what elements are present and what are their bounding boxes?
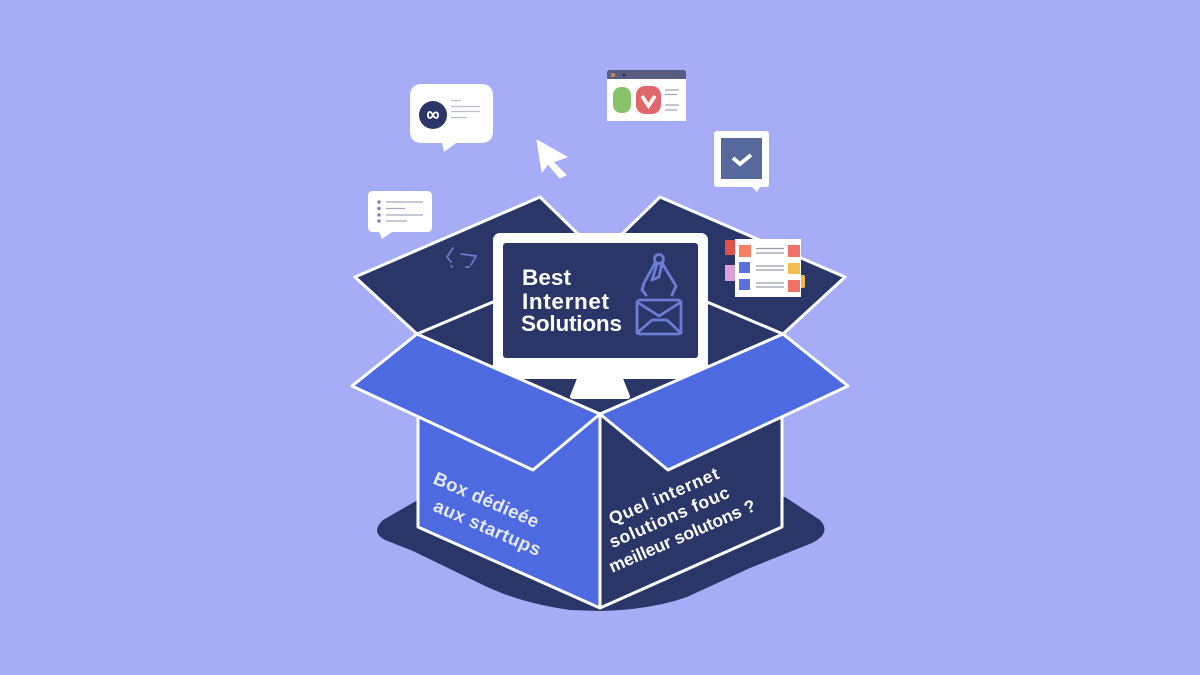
back left flap [355,197,580,334]
monitor screen [503,243,698,358]
window buttons [611,73,615,77]
screen title: Internet [522,289,610,314]
right face label: solutions fouc [606,482,732,552]
row lines [756,248,784,287]
logo glyph [428,112,438,118]
colored task list card [725,239,805,297]
icon: envelope with pin [637,254,681,334]
tabs behind card [725,240,737,255]
screen title: Best [522,265,572,290]
icon: code brackets on flap [447,248,476,267]
window title bar [607,70,686,79]
speech bubble with logo [410,84,493,152]
right box face [600,414,782,608]
list lines [386,202,423,221]
bubble text lines [451,100,480,118]
check mark [733,155,751,164]
red badge with check [636,86,661,114]
logo circle [419,101,447,129]
box ground shadow [377,497,824,611]
speech bubble with list [368,191,432,239]
monitor stand [570,376,630,399]
icon: cursor arrow [537,140,567,178]
monitor [493,233,708,399]
list bullets [377,200,381,223]
right face label [588,455,759,577]
window text lines [665,90,679,110]
left box face [418,414,600,608]
monitor frame [493,233,708,379]
checkbox bubble [714,131,769,192]
card [735,239,801,297]
right face label: Quel internet [606,463,722,529]
box interior [417,299,783,414]
checkbox square [721,138,762,179]
back right flap [620,197,845,334]
browser window card [607,70,686,121]
screen title: Solutions [521,311,622,336]
front left flap [352,334,600,470]
left face label: aux startups [431,495,544,560]
right face label: meilleur solutons ? [606,495,759,577]
left face label: Box dédieée [430,467,542,532]
right tabs [788,245,800,257]
green pill [613,87,631,113]
left face label [420,467,554,560]
front right flap [600,334,848,470]
row markers [739,245,751,257]
